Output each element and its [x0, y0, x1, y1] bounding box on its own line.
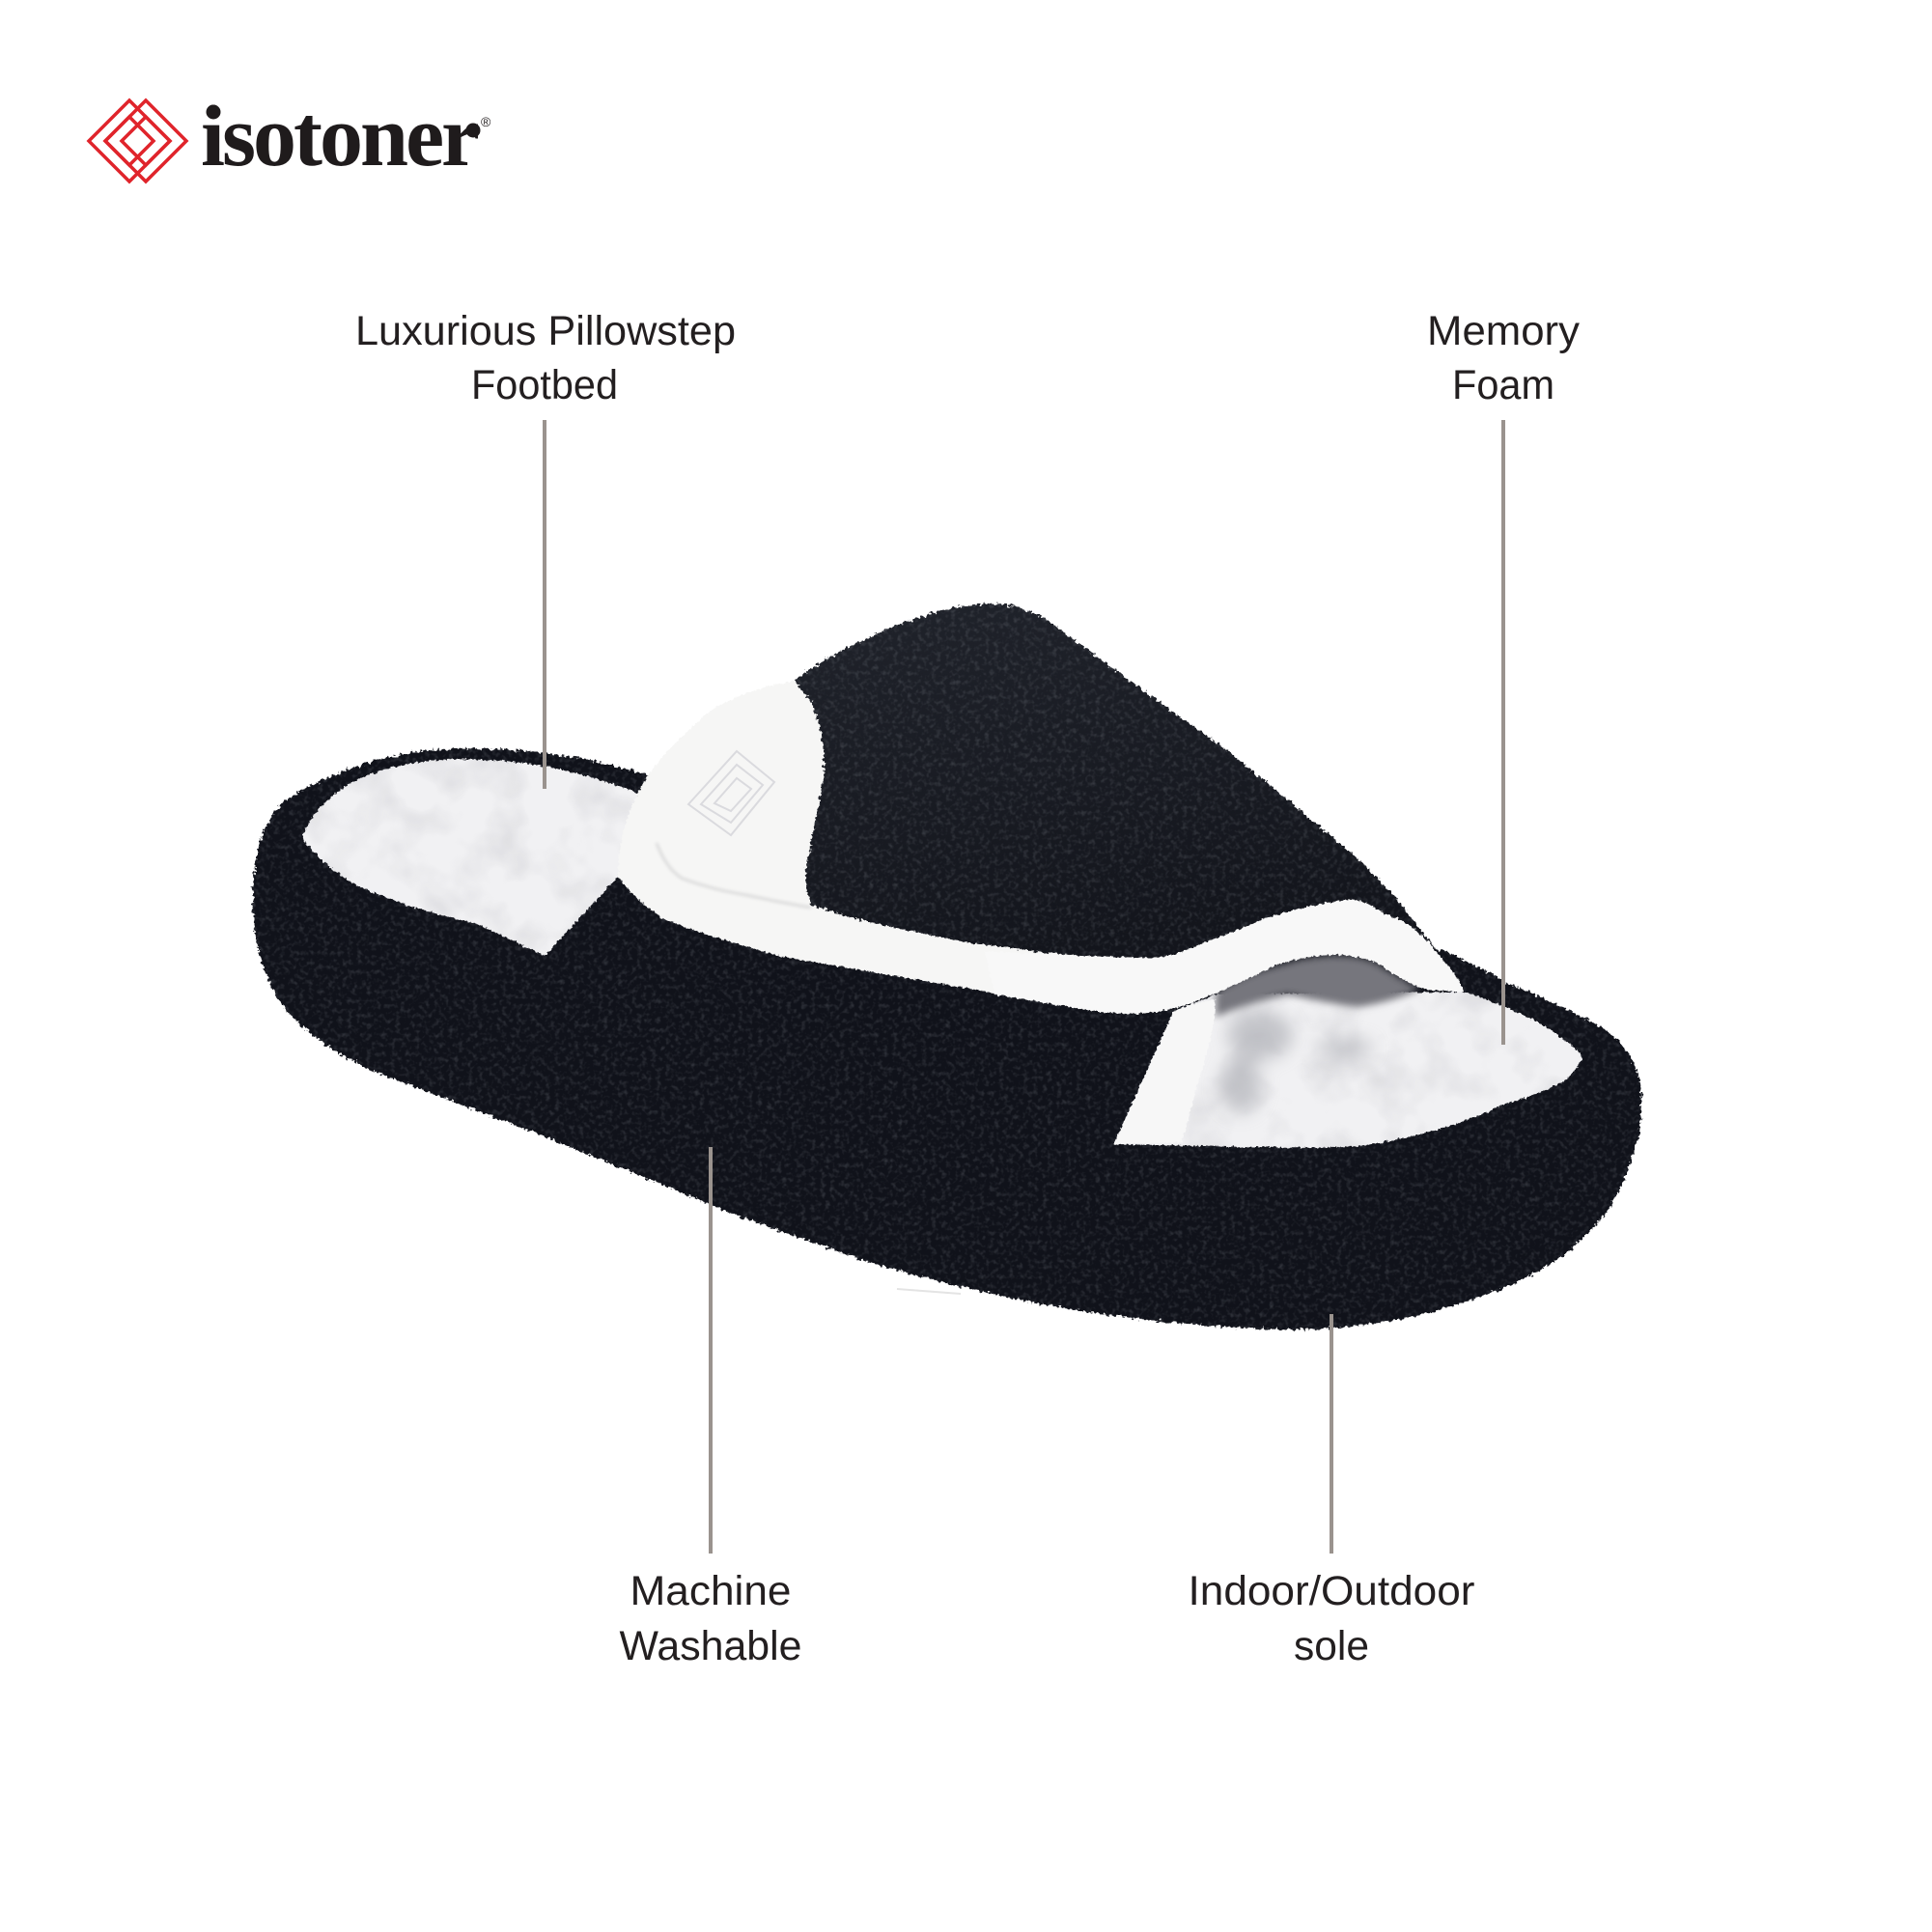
white toe band	[985, 900, 1464, 1014]
white strap lining and piping	[618, 681, 1464, 1014]
leader line	[1330, 1314, 1333, 1554]
callout: Memory Foam	[1427, 308, 1580, 1045]
callout: Machine Washable	[620, 1147, 801, 1669]
side strip of white piping	[1114, 999, 1216, 1144]
callout: Luxurious Pillowstep Footbed	[355, 308, 736, 789]
label text: Memory	[1427, 308, 1580, 354]
leader line	[709, 1147, 713, 1554]
seam between strap lining and piping	[657, 843, 811, 908]
dark toe opening shadow	[1216, 956, 1419, 1017]
label text: Washable	[620, 1623, 801, 1669]
rear footbed	[302, 759, 639, 956]
icon: red nested diamonds	[89, 100, 186, 182]
front footbed	[1114, 992, 1582, 1148]
label text: Luxurious Pillowstep	[355, 308, 736, 354]
isotoner logo	[89, 89, 491, 184]
label text: Machine	[630, 1568, 792, 1614]
leader line	[543, 420, 546, 789]
callout: Indoor/Outdoor sole	[1188, 1314, 1475, 1669]
footbed soft shadows	[1219, 1010, 1373, 1113]
leader line	[1501, 420, 1505, 1045]
wordmark: isotoner	[201, 89, 480, 184]
label text: Indoor/Outdoor	[1188, 1568, 1475, 1614]
registered mark: ®	[481, 114, 491, 129]
label text: Foam	[1452, 362, 1554, 408]
slipper black body and sole	[253, 748, 1641, 1330]
label text: Footbed	[471, 362, 618, 408]
embroidered strap logo	[688, 751, 774, 835]
label text: sole	[1294, 1623, 1369, 1669]
slipper product illustration	[253, 604, 1641, 1330]
black strap panel	[795, 604, 1445, 964]
faint floor reflection	[897, 1289, 961, 1294]
